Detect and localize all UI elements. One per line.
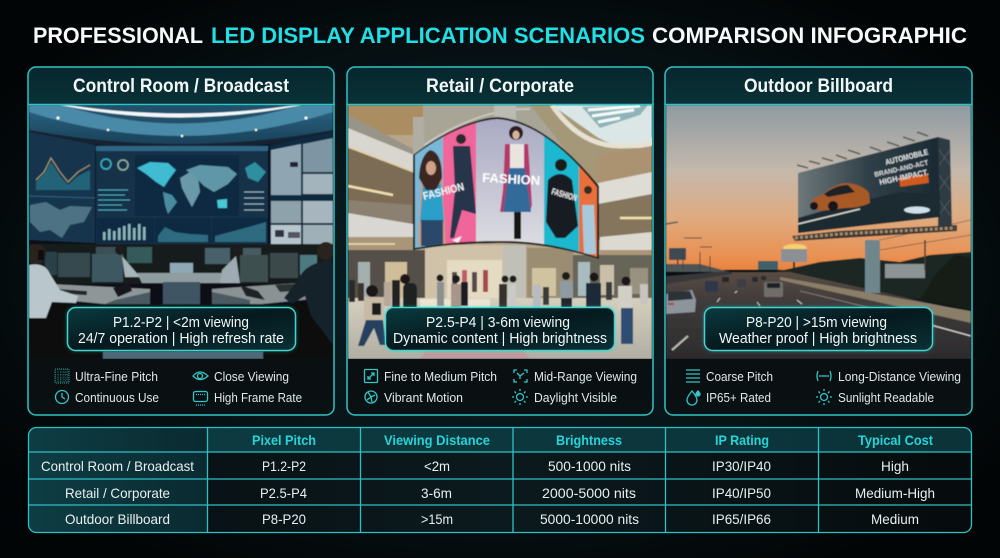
cars bbox=[666, 276, 783, 314]
icon: ultra-fine pitch grid bbox=[55, 369, 69, 383]
outdoor callout: P8-P20 | >15m viewing bbox=[746, 314, 887, 331]
icon: clock bbox=[56, 390, 68, 404]
row: retail: P2.5-P4 bbox=[260, 485, 307, 501]
outdoor features: Sunlight Readable bbox=[838, 390, 934, 405]
row: outdoor bbox=[65, 511, 919, 527]
icon: water drop bbox=[687, 391, 700, 405]
shoppers bbox=[349, 272, 648, 346]
icon: mid-range viewing bbox=[514, 370, 527, 382]
table header row bbox=[252, 432, 933, 448]
icon: coarse pitch lines bbox=[686, 370, 700, 382]
control room features: Ultra-Fine Pitch bbox=[75, 369, 158, 384]
row: retail: Retail / Corporate bbox=[65, 485, 170, 501]
control room photo bbox=[26, 105, 335, 359]
retail heading: Retail / Corporate bbox=[426, 76, 574, 97]
row: control room: High bbox=[881, 458, 909, 474]
outdoor heading: Outdoor Billboard bbox=[744, 76, 893, 97]
fashion LED screen: FASHION bbox=[550, 186, 578, 203]
icon: fine to medium pitch bbox=[364, 370, 378, 382]
row: retail: IP40/IP50 bbox=[712, 485, 771, 501]
row: retail: Medium-High bbox=[855, 485, 935, 501]
outdoor callout: Weather proof | High brightness bbox=[719, 330, 917, 347]
outdoor heading bbox=[665, 67, 972, 104]
control room callout: 24/7 operation | High refresh rate bbox=[78, 330, 284, 347]
billboard: HIGH-IMPACT. bbox=[879, 168, 929, 187]
icon: vibrant motion bbox=[365, 391, 377, 403]
icon: eye bbox=[193, 372, 208, 380]
outdoor features: IP65+ Rated bbox=[706, 390, 771, 405]
icon: daylight sun bbox=[512, 389, 528, 405]
distant city and trees bbox=[666, 220, 971, 310]
billboard: BRAND-AND-ACT bbox=[874, 160, 930, 179]
table grid bbox=[28, 427, 972, 532]
panel: retail / corporate bbox=[347, 67, 653, 415]
row: control room: 500-1000 nits bbox=[548, 458, 631, 474]
row: control room: Control Room / Broadcast bbox=[41, 458, 194, 474]
row: outdoor: >15m bbox=[421, 511, 453, 527]
outdoor features bbox=[686, 369, 961, 405]
row: control room bbox=[41, 458, 909, 474]
billboard: AUTOMOBILE bbox=[884, 147, 930, 167]
table header row: Brightness bbox=[556, 432, 622, 448]
row: outdoor: P8-P20 bbox=[262, 511, 306, 527]
row: control room: P1.2-P2 bbox=[262, 458, 306, 474]
outdoor photo bbox=[666, 105, 971, 359]
back monitors bbox=[45, 247, 317, 282]
fashion LED screen: FASHION bbox=[482, 170, 541, 188]
control room callout: P1.2-P2 | <2m viewing bbox=[113, 314, 249, 331]
row: retail: 3-6m bbox=[421, 485, 452, 501]
icon: long distance arrows bbox=[817, 371, 831, 381]
operators bbox=[29, 242, 333, 344]
center wall screen bbox=[96, 146, 268, 244]
panel borders bbox=[28, 67, 972, 415]
table header row: IP Rating bbox=[715, 432, 769, 448]
control room callout bbox=[67, 307, 296, 351]
title bbox=[33, 23, 967, 48]
outdoor features: Coarse Pitch bbox=[706, 369, 773, 384]
row: control room: IP30/IP40 bbox=[712, 458, 771, 474]
control room features: Close Viewing bbox=[214, 369, 289, 384]
retail callout bbox=[385, 307, 615, 351]
icon: sunlight bbox=[816, 389, 832, 405]
row: outdoor: Outdoor Billboard bbox=[65, 511, 170, 527]
row: retail bbox=[65, 485, 935, 501]
title: COMPARISON INFOGRAPHIC bbox=[652, 23, 967, 48]
retail callout: Dynamic content | High brightness bbox=[393, 330, 607, 347]
retail features: Daylight Visible bbox=[534, 390, 617, 405]
control room heading bbox=[28, 67, 334, 104]
control room features: High Frame Rate bbox=[214, 390, 302, 405]
panel: outdoor billboard bbox=[665, 67, 972, 415]
table header row: Typical Cost bbox=[858, 432, 933, 448]
retail photo bbox=[348, 105, 653, 359]
desks bbox=[56, 272, 307, 305]
billboard bbox=[792, 132, 957, 293]
highway bbox=[666, 271, 971, 359]
title: LED DISPLAY APPLICATION SCENARIOS bbox=[211, 23, 645, 48]
icon: monitor film bbox=[194, 392, 208, 405]
left wall screen bbox=[29, 132, 95, 243]
retail features: Mid-Range Viewing bbox=[534, 369, 637, 384]
control room heading: Control Room / Broadcast bbox=[73, 76, 290, 97]
row: retail: 2000-5000 nits bbox=[542, 485, 636, 501]
fashion LED screen: FASHION bbox=[422, 181, 466, 203]
retail features bbox=[364, 369, 637, 405]
row: control room: <2m bbox=[424, 458, 450, 474]
retail callout: P2.5-P4 | 3-6m viewing bbox=[426, 314, 570, 331]
mall interior bbox=[348, 105, 653, 260]
control room features: Continuous Use bbox=[75, 390, 159, 405]
fashion LED screen bbox=[413, 115, 599, 260]
outdoor features: Long-Distance Viewing bbox=[838, 369, 961, 384]
panel: control room / broadcast bbox=[26, 67, 335, 415]
row: outdoor: Medium bbox=[871, 511, 919, 527]
right wall screen bbox=[270, 132, 333, 245]
retail heading bbox=[347, 67, 653, 104]
retail features: Fine to Medium Pitch bbox=[384, 369, 497, 384]
control room features bbox=[55, 369, 302, 405]
storefronts bbox=[348, 245, 653, 301]
table header row: Pixel Pitch bbox=[252, 432, 316, 448]
row: outdoor: 5000-10000 nits bbox=[540, 511, 639, 527]
table header row: Viewing Distance bbox=[384, 432, 490, 448]
model figures bbox=[418, 126, 596, 254]
retail features: Vibrant Motion bbox=[384, 390, 463, 405]
title: PROFESSIONAL bbox=[33, 23, 203, 48]
comparison table bbox=[28, 427, 972, 532]
outdoor callout bbox=[704, 307, 933, 351]
row: outdoor: IP65/IP66 bbox=[712, 511, 771, 527]
